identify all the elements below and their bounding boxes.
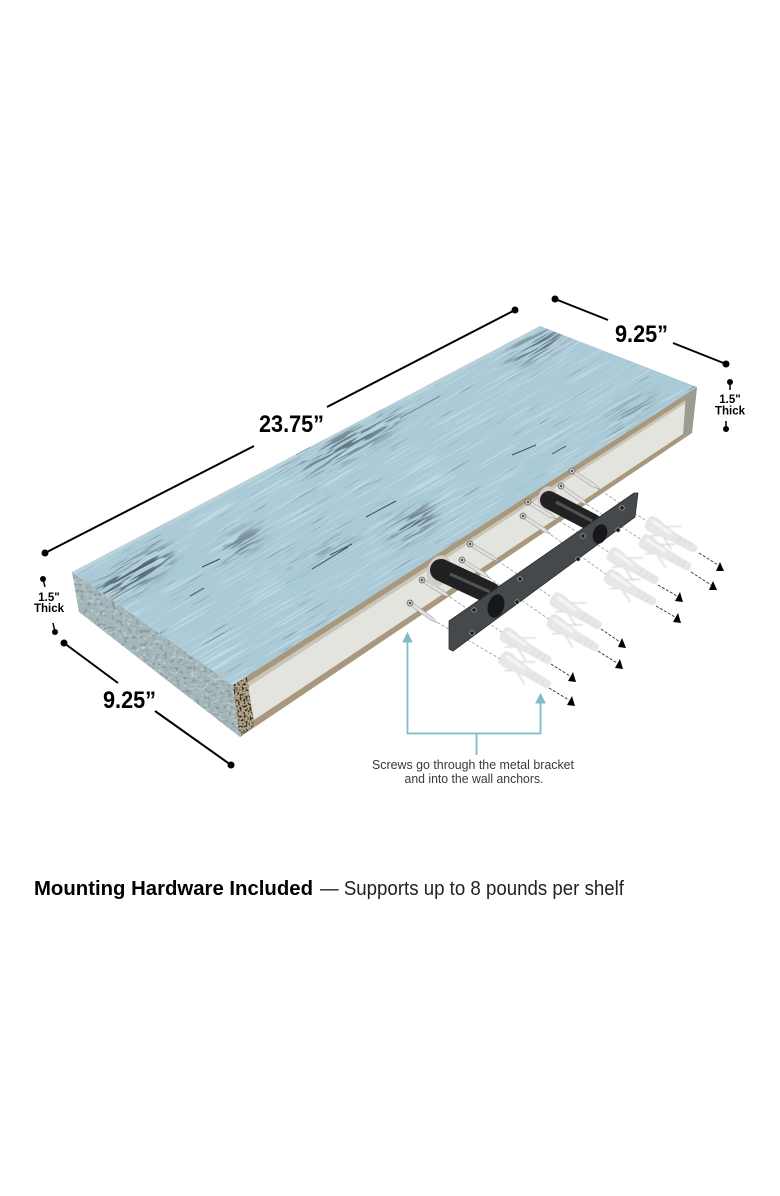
callout caption: [372, 758, 575, 786]
callout caption: Screws go through the metal bracket: [372, 758, 575, 772]
panel: floating shelf: [72, 326, 697, 737]
callout caption: and into the wall anchors.: [404, 772, 544, 786]
dimension: left thickness 1.5: [34, 576, 65, 635]
dark grain scratches: [190, 396, 566, 596]
bracket holes: [485, 522, 610, 620]
bracket plate: [449, 493, 638, 651]
screws: [406, 467, 601, 625]
dimension: left depth 9.25: [60, 640, 234, 768]
wall anchors: [495, 510, 703, 696]
dimension: left thickness 1.5: Thick: [34, 603, 65, 615]
dimension: left thickness 1.5: 1.5": [38, 592, 60, 604]
dimension: top depth 9.25: [552, 296, 730, 368]
dashed arrows beyond anchors: [549, 553, 724, 706]
dimension: right thickness 1.5: [715, 379, 746, 432]
heading: mounting hardware: [34, 878, 624, 900]
right standoff post: [534, 484, 593, 523]
shelf left end face (particle board): [72, 572, 240, 737]
dimension: length 23.75: [42, 306, 518, 556]
dimension: length 23.75: 23.75”: [259, 411, 324, 438]
shelf front edge with recessed white channel: [228, 387, 697, 740]
heading: mounting hardware: — Supports up to 8 pounds per shelf: [320, 878, 624, 900]
dotted guide lines: screws to anchors: [433, 488, 648, 660]
dimension: right thickness 1.5: 1.5": [719, 394, 741, 406]
heading: mounting hardware: Mounting Hardware Included: [34, 878, 313, 900]
callout bracket arrows: [403, 633, 545, 755]
left standoff post: [422, 552, 490, 593]
dimension: top depth 9.25: 9.25”: [615, 321, 668, 348]
dimension: right thickness 1.5: Thick: [715, 406, 746, 418]
shelf top surface (distressed blue wood): [72, 326, 697, 685]
metal bracket with standoff posts: [422, 484, 638, 651]
dimension: left depth 9.25: 9.25”: [103, 687, 156, 714]
